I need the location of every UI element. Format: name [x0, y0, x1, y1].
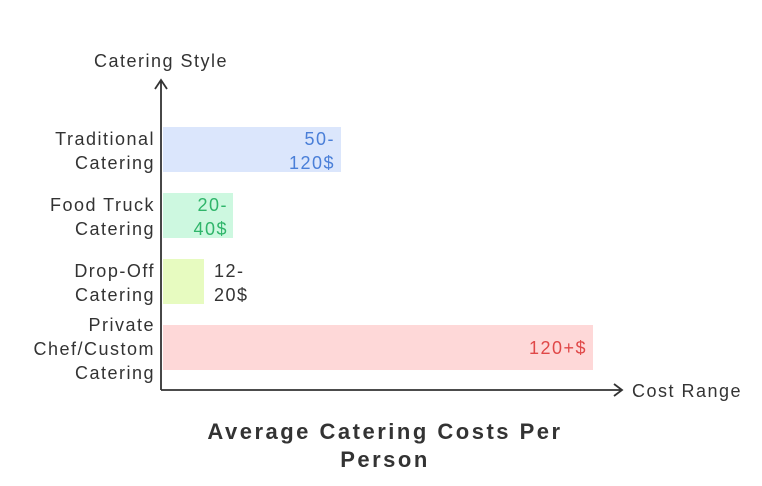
value: food truck: 40$: [193, 219, 228, 239]
value: traditional: [289, 129, 335, 173]
title: Average Catering Costs Per: [207, 419, 563, 444]
value: food truck: 20-: [197, 195, 228, 215]
value: drop-off: 12-: [214, 261, 245, 281]
label: private chef: Catering: [75, 363, 155, 383]
label: traditional: Catering: [75, 153, 155, 173]
label: private chef: Chef/Custom: [33, 339, 155, 359]
title: [207, 419, 563, 472]
label: traditional: [55, 129, 155, 173]
bar: traditional: [163, 127, 341, 172]
label: drop-off: Catering: [75, 285, 155, 305]
value: traditional: 120$: [289, 153, 335, 173]
bar: private chef: [163, 325, 593, 370]
label: drop-off: Drop-Off: [74, 261, 155, 281]
label: drop-off: [74, 261, 155, 305]
value: drop-off: [214, 261, 249, 305]
label: traditional: Traditional: [55, 129, 155, 149]
y axis title: Catering Style: [94, 51, 228, 71]
label: private chef: [33, 315, 155, 383]
value: drop-off: 20$: [214, 285, 249, 305]
label: food truck: Food Truck: [50, 195, 155, 215]
bar: drop-off: [163, 259, 204, 304]
bar: food truck: [163, 193, 233, 238]
x axis title: Cost Range: [632, 381, 742, 401]
value: private chef: 120+$: [529, 338, 587, 358]
value: food truck: [193, 195, 228, 239]
label: private chef: Private: [88, 315, 155, 335]
value: traditional: 50-: [304, 129, 335, 149]
label: food truck: Catering: [75, 219, 155, 239]
title: Person: [340, 447, 430, 472]
label: food truck: [50, 195, 155, 239]
